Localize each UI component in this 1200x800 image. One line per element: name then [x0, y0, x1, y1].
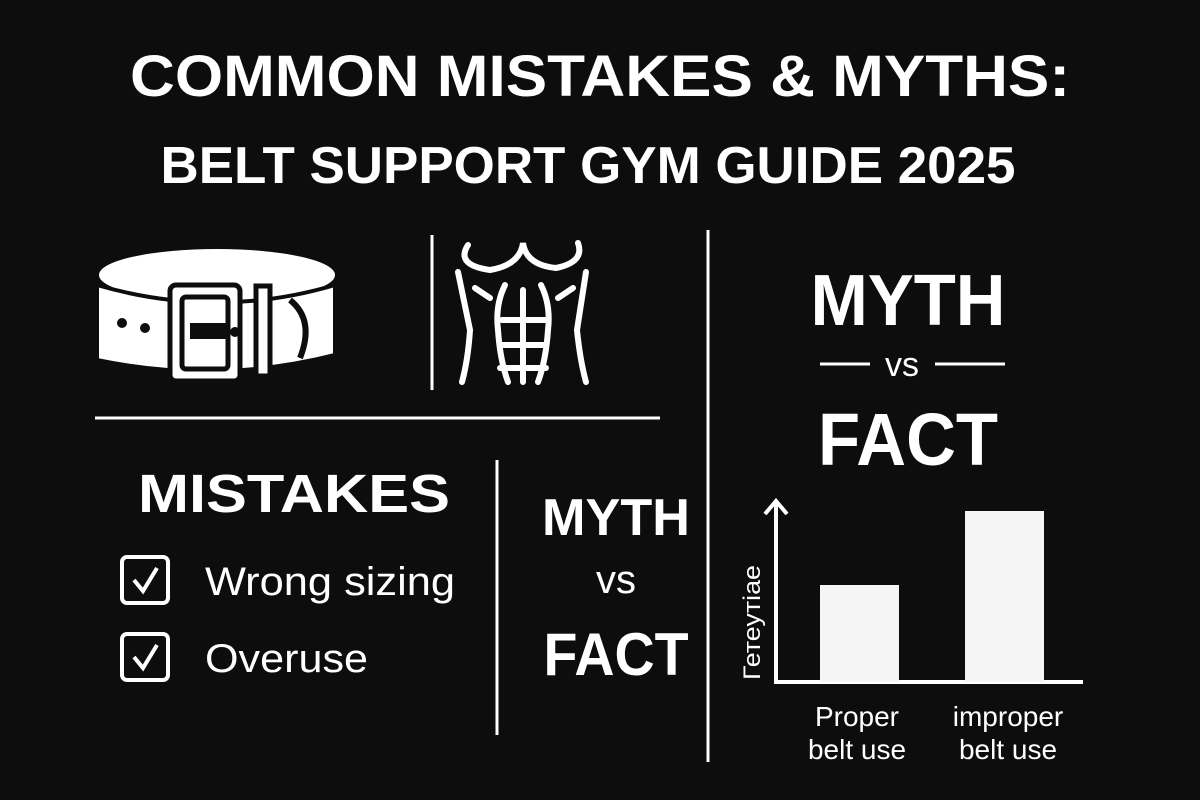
title: COMMON MISTAKES & MYTHS:: [130, 44, 1070, 109]
list: mistakes: [122, 557, 455, 681]
bar chart: Гетеутiae: [739, 565, 766, 680]
title: [130, 44, 1070, 195]
text: myth vs fact large: [810, 261, 1006, 481]
bar chart: improper: [953, 701, 1063, 732]
bar chart: [739, 501, 1083, 765]
icon: belt: [97, 249, 335, 381]
title: BELT SUPPORT GYM GUIDE 2025: [160, 137, 1015, 195]
icon: abs torso: [458, 243, 586, 382]
text: myth vs fact small: vs: [596, 558, 636, 602]
text: myth vs fact small: [542, 489, 690, 688]
text: myth vs fact large: MYTH: [810, 261, 1006, 341]
list: mistakes: Wrong sizing: [205, 560, 455, 604]
heading: mistakes: MISTAKES: [138, 464, 450, 524]
bar chart: Proper: [815, 701, 899, 732]
bar chart: belt use: [959, 734, 1057, 765]
text: myth vs fact small: MYTH: [542, 489, 690, 547]
bar chart: belt use: [808, 734, 906, 765]
text: myth vs fact large: FACT: [818, 398, 998, 481]
text: myth vs fact small: FACT: [544, 621, 688, 688]
list: mistakes: Overuse: [205, 637, 368, 681]
text: myth vs fact large: vs: [885, 346, 919, 384]
